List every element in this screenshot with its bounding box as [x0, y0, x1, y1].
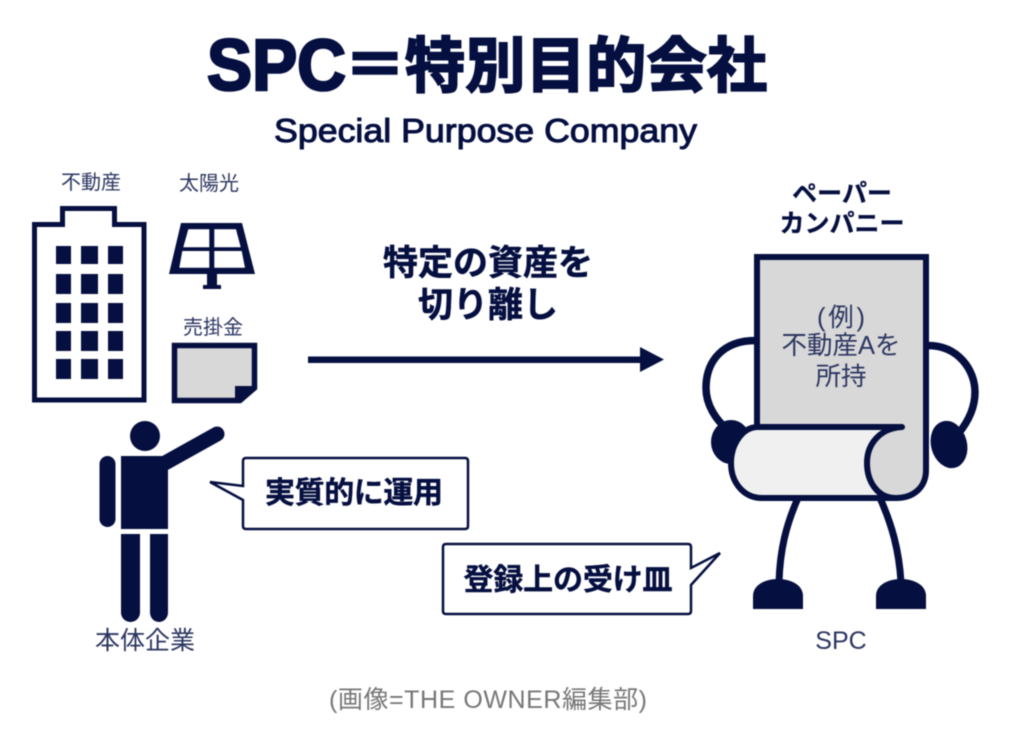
- icon: solar panel: [169, 223, 255, 289]
- arrow caption: 特定の資産を: [383, 244, 593, 283]
- title: ＝: [345, 33, 405, 100]
- icon: building: [34, 208, 144, 400]
- right hand: [925, 417, 973, 472]
- label: paper company: カンパニー: [779, 210, 905, 238]
- callout: effectively operates: 実質的に運用: [265, 477, 443, 510]
- label: SPC: SPC: [815, 627, 867, 655]
- label: real estate: 不動産: [61, 171, 121, 194]
- paper roll: [731, 427, 902, 498]
- paper text: 所持: [815, 363, 867, 391]
- arrow caption: [383, 244, 593, 325]
- label: receivables: 売掛金: [183, 316, 243, 339]
- paper text: (例): [817, 304, 865, 332]
- title: [207, 26, 767, 106]
- label: parent company: 本体企業: [95, 627, 195, 655]
- label: paper company: ペーパー: [792, 180, 892, 208]
- left foot: [753, 579, 803, 609]
- callout: effectively operates: [210, 458, 468, 529]
- arrow: separation: [308, 347, 664, 372]
- paper text: 不動産Aを: [781, 332, 901, 360]
- right foot: [876, 579, 926, 609]
- callout: registered vehicle: 登録上の受け皿: [464, 564, 672, 597]
- title: SPC: [207, 26, 346, 106]
- title: 特別目的会社: [405, 33, 767, 100]
- right arm: [927, 345, 975, 434]
- label: solar: 太陽光: [179, 172, 239, 195]
- left hand: [711, 420, 751, 464]
- image credit: (画像=THE OWNER編集部): [329, 686, 647, 714]
- subtitle: Special Purpose Company: [274, 112, 698, 149]
- callout: registered vehicle: [443, 544, 720, 614]
- arrow caption: 切り離し: [418, 286, 558, 325]
- label: paper company: [779, 180, 905, 238]
- character: SPC paper company: [706, 257, 975, 609]
- paper text: [781, 304, 901, 391]
- icon: receivable document: [174, 346, 257, 403]
- figure: parent company person: [100, 421, 217, 622]
- legs: [779, 498, 901, 582]
- paper sheet: [757, 257, 926, 498]
- left arm: [706, 340, 757, 430]
